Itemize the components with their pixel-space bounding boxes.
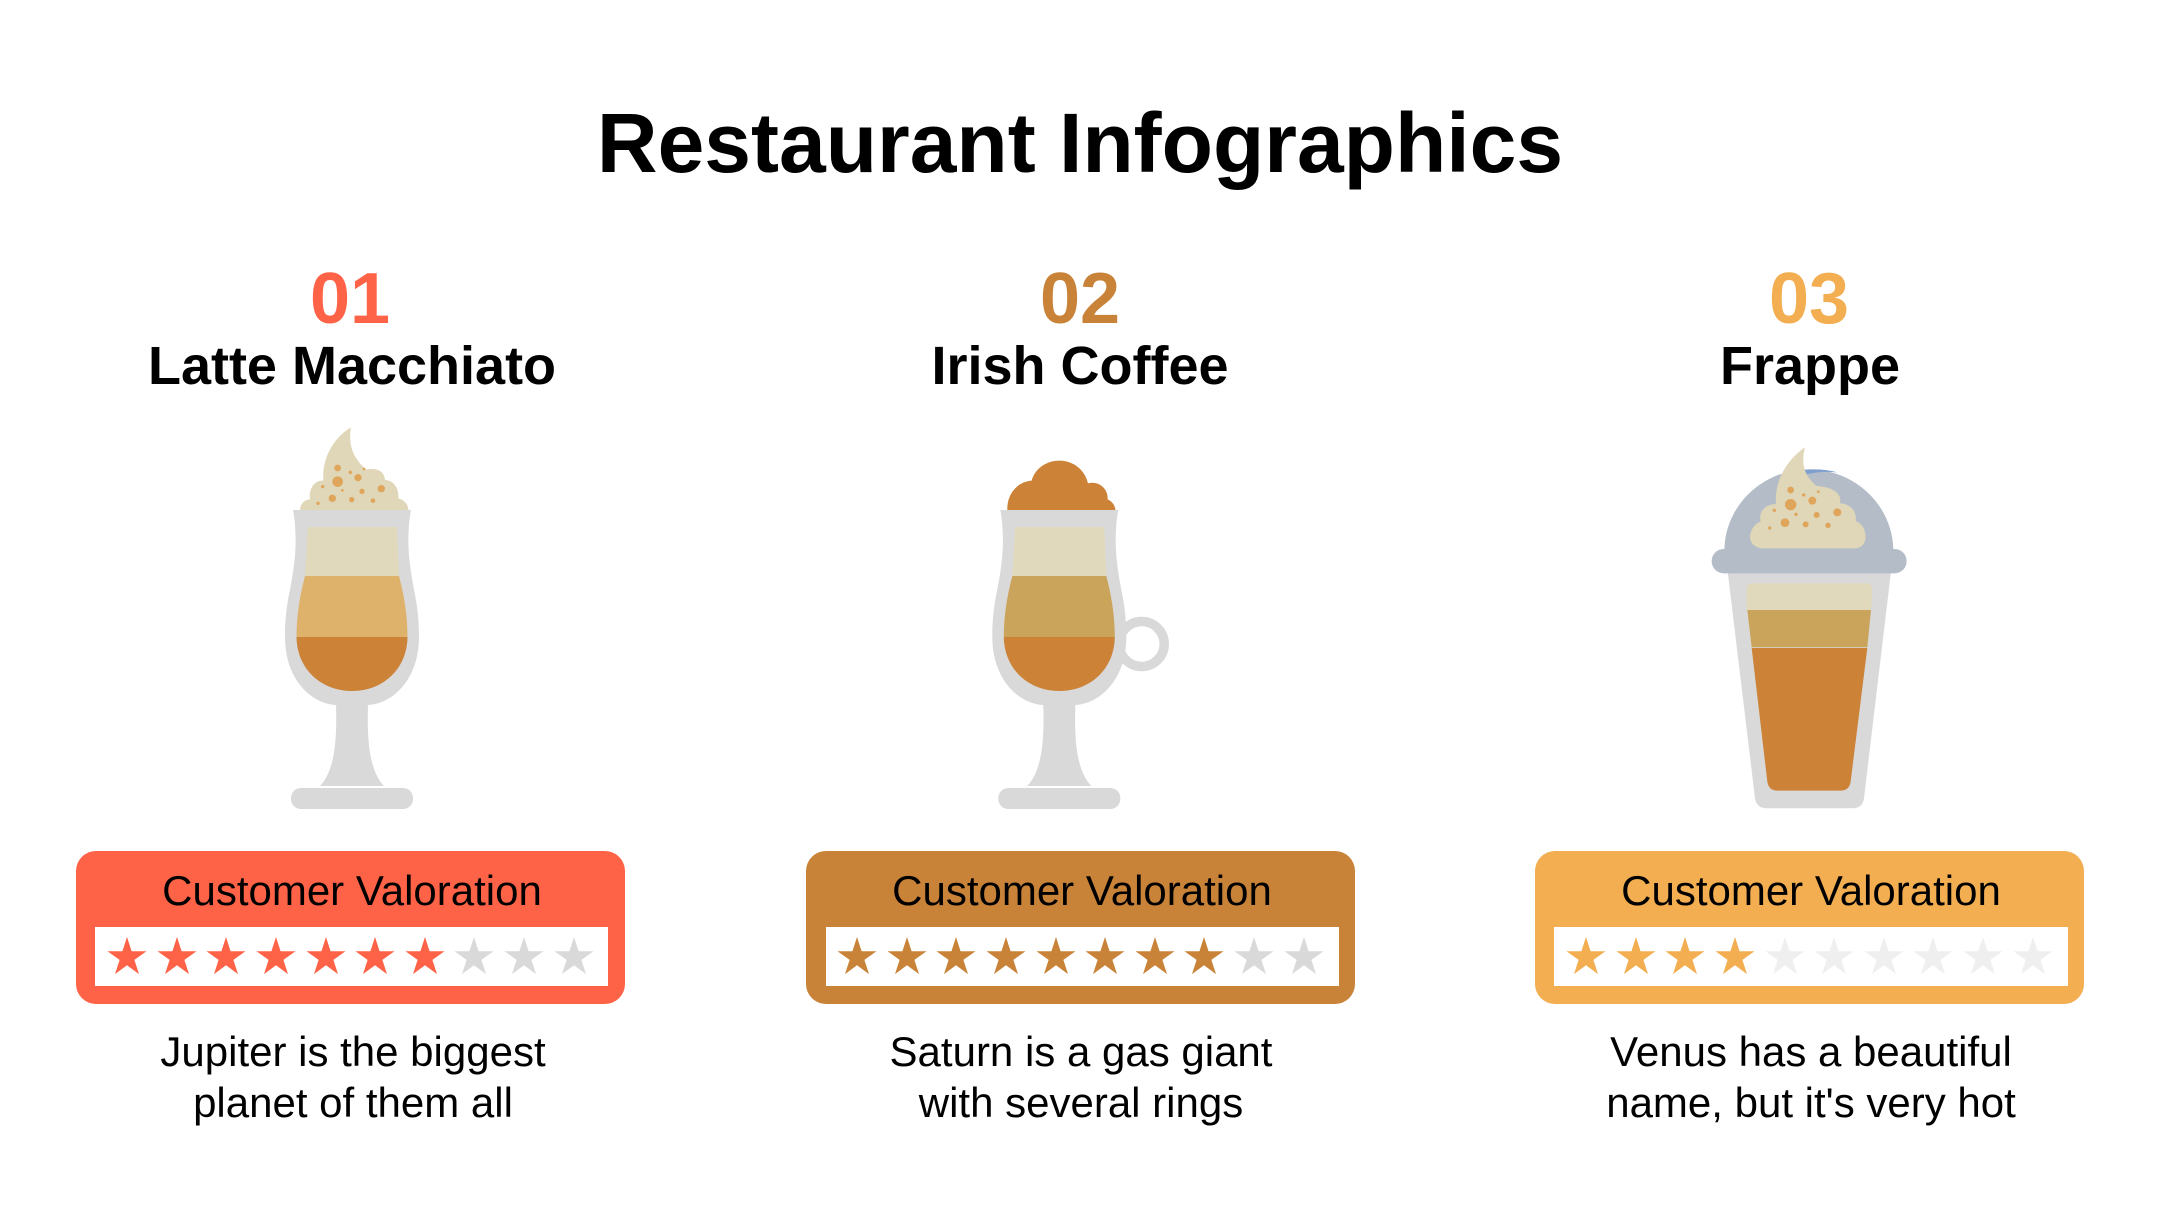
heading: Irish Coffee: Irish Coffee [931,336,1229,396]
label: Customer Valoration [892,867,1272,914]
column 3: Frappe [1535,259,2084,1126]
panel: customer valoration 01 [76,851,625,1004]
description 01 [160,1028,546,1126]
description 01: Jupiter is the biggest [160,1028,546,1075]
number 03: 03 [1769,259,1849,339]
description 02 [890,1028,1273,1126]
number 02: 02 [1040,259,1120,339]
label: Customer Valoration [162,867,542,914]
description 03: name, but it's very hot [1606,1079,2016,1126]
panel: customer valoration 02 [806,851,1355,1004]
panel: customer valoration 03 [1535,851,2084,1004]
description 03: Venus has a beautiful [1610,1028,2012,1075]
icon: frappe cup [1712,447,1907,808]
icon: latte glass [285,427,419,809]
heading: Frappe: Frappe [1720,336,1900,396]
description 03 [1606,1028,2016,1126]
icon: irish coffee glass [992,461,1164,809]
column 1: Latte Macchiato [76,259,625,1126]
number 01: 01 [310,259,390,339]
description 02: Saturn is a gas giant [890,1028,1273,1075]
title: Restaurant Infographics [597,96,1563,190]
heading: Latte Macchiato: Latte Macchiato [148,336,556,396]
description 01: planet of them all [193,1079,513,1126]
rating: 4 of 10 stars [1566,937,2052,974]
rating: 7 of 10 stars [108,937,594,974]
description 02: with several rings [918,1079,1243,1126]
column 2: Irish Coffee [806,259,1355,1126]
rating: 8 of 10 stars [838,937,1324,974]
label: Customer Valoration [1621,867,2001,914]
